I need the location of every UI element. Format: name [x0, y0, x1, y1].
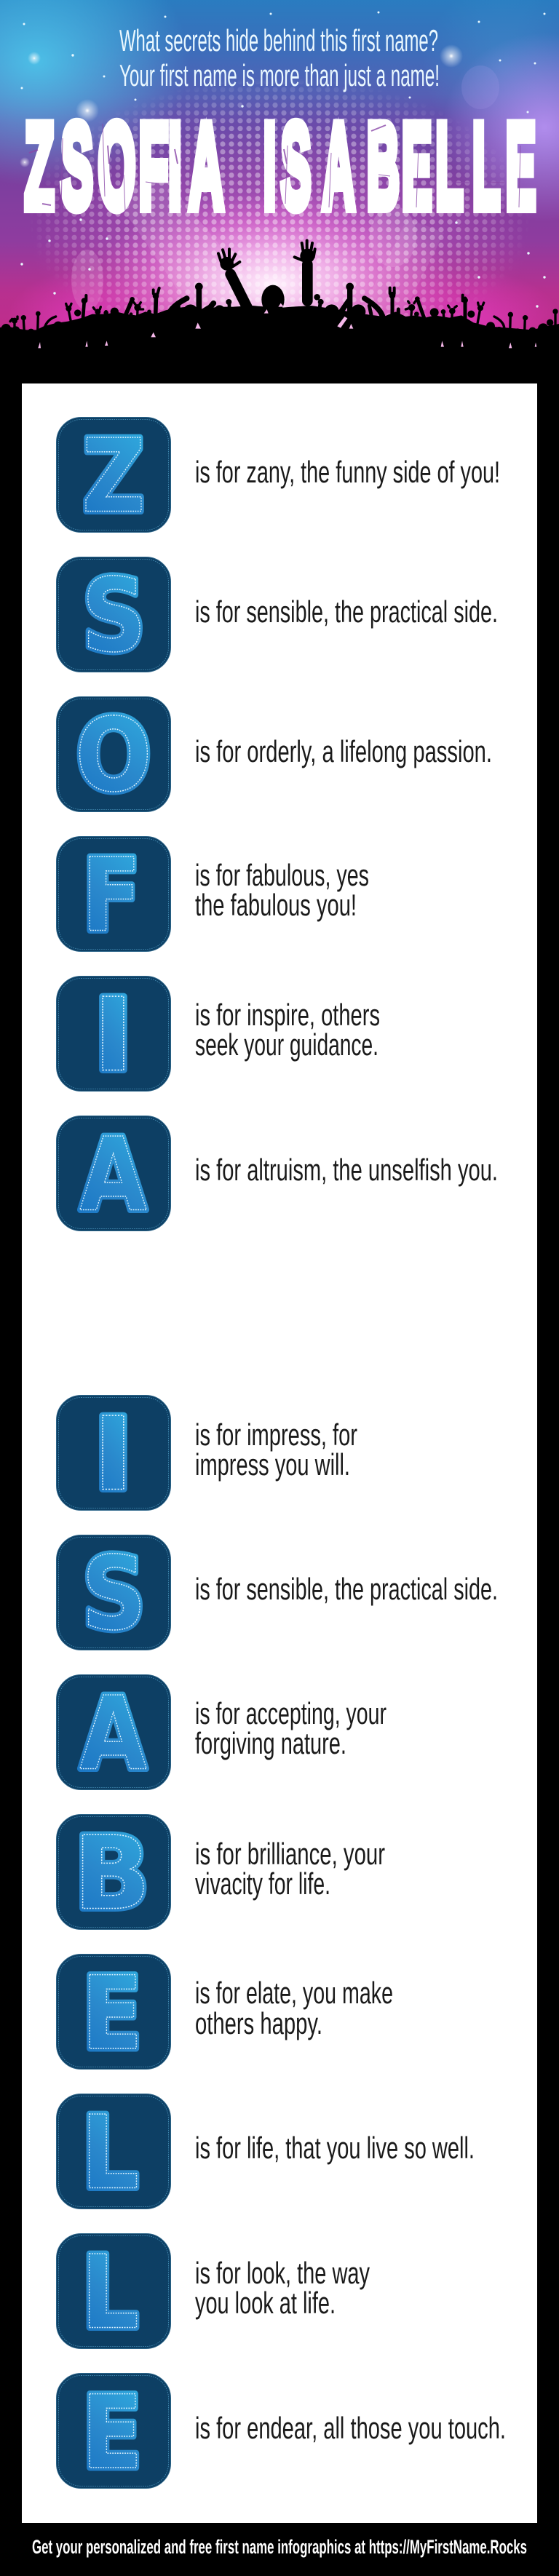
icon: letter S: S [82, 557, 146, 675]
icon: letter A [57, 1675, 170, 1793]
crowd right half [277, 241, 559, 364]
text: A meaning [195, 1696, 386, 1760]
icon: letter Z [57, 418, 170, 536]
sparkles [20, 12, 546, 308]
icon: letter B: B [74, 1815, 151, 1933]
row: E (last) [57, 2374, 506, 2492]
icon: letter A: A [79, 1116, 147, 1234]
banner background [0, 0, 559, 330]
text: F meaning: the fabulous you! [195, 888, 357, 922]
row: L [57, 2094, 475, 2212]
crowd silhouette [0, 241, 559, 364]
icon: letter L: L [81, 2094, 139, 2212]
icon: letter F: F [82, 837, 141, 955]
name title: ZSOFIA [25, 98, 223, 233]
row: I [57, 977, 380, 1094]
icon: letter A [57, 1116, 170, 1234]
icon: letter B: B [74, 1815, 151, 1933]
row: A (second name) [57, 1675, 386, 1793]
text: A meaning: is for accepting, your [195, 1696, 386, 1730]
white content panel [22, 383, 537, 2523]
text: F meaning: is for fabulous, yes [195, 858, 369, 892]
text: A meaning: forgiving nature. [195, 1726, 346, 1760]
header banner [0, 0, 559, 375]
icon: letter Z: Z [82, 418, 145, 536]
icon: letter O: O [75, 697, 152, 815]
icon: letter E: E [82, 1955, 143, 2073]
text: E meaning: others happy. [195, 2006, 322, 2040]
icon: letter L: L [81, 2234, 139, 2352]
icon: letter L: L [81, 2234, 139, 2352]
icon: letter S: S [82, 1535, 146, 1653]
text: E meaning [195, 1976, 393, 2040]
icon: letter I [57, 1396, 170, 1514]
row: S [57, 557, 498, 675]
name title [25, 98, 536, 234]
icon: letter S: S [82, 1535, 146, 1653]
icon: letter E: E [82, 2374, 143, 2492]
text: L meaning: you look at life. [195, 2286, 336, 2320]
row: A [57, 1116, 498, 1234]
text: B meaning: vivacity for life. [195, 1867, 330, 1901]
icon: letter A: A [79, 1675, 147, 1793]
icon: letter I [57, 977, 170, 1094]
icon: letter F [57, 837, 170, 955]
text: I meaning [195, 1418, 357, 1482]
text: I meaning [195, 998, 380, 1062]
icon: letter S [57, 557, 170, 675]
icon: letter A: A [79, 1675, 147, 1793]
text: B meaning [195, 1837, 385, 1901]
row: I (second name) [57, 1396, 357, 1514]
row: Z [57, 418, 500, 536]
row: F [57, 837, 369, 955]
icon: letter L [57, 2234, 170, 2352]
icon: letter I: I [92, 1396, 134, 1514]
icon: letter I: I [92, 1396, 134, 1514]
icon: letter L: L [81, 2094, 139, 2212]
text: B meaning: is for brilliance, your [195, 1837, 385, 1871]
icon: letter L [57, 2094, 170, 2212]
icon: letter F: F [82, 837, 141, 955]
icon: letter E: E [82, 2374, 143, 2492]
text: I meaning: is for inspire, others [195, 998, 380, 1032]
row: L (second) [57, 2234, 370, 2352]
icon: letter S: S [82, 557, 146, 675]
icon: letter I: I [92, 977, 134, 1094]
text: I meaning: seek your guidance. [195, 1027, 378, 1062]
icon: letter O: O [75, 697, 152, 815]
text: E meaning: is for elate, you make [195, 1976, 393, 2010]
row: E [57, 1955, 393, 2073]
row: B [57, 1815, 385, 1933]
text: L meaning [195, 2256, 370, 2320]
text: I meaning: is for impress, for [195, 1418, 357, 1452]
row: S (second name) [57, 1535, 498, 1653]
icon: letter A: A [79, 1116, 147, 1234]
icon: letter S [57, 1535, 170, 1653]
name title: ISABELLE [263, 100, 536, 234]
text: L meaning: is for look, the way [195, 2256, 370, 2290]
icon: letter O [57, 697, 170, 815]
row: O [57, 697, 492, 815]
icon: letter E [57, 2374, 170, 2492]
icon: letter I: I [92, 977, 134, 1094]
icon: letter E: E [82, 1955, 143, 2073]
crowd left half [0, 249, 285, 364]
icon: letter Z: Z [82, 418, 145, 536]
icon: letter B [57, 1815, 170, 1933]
tagline [119, 23, 440, 92]
icon: letter E [57, 1955, 170, 2073]
text: F meaning [195, 858, 369, 922]
text: I meaning: impress you will. [195, 1447, 350, 1482]
